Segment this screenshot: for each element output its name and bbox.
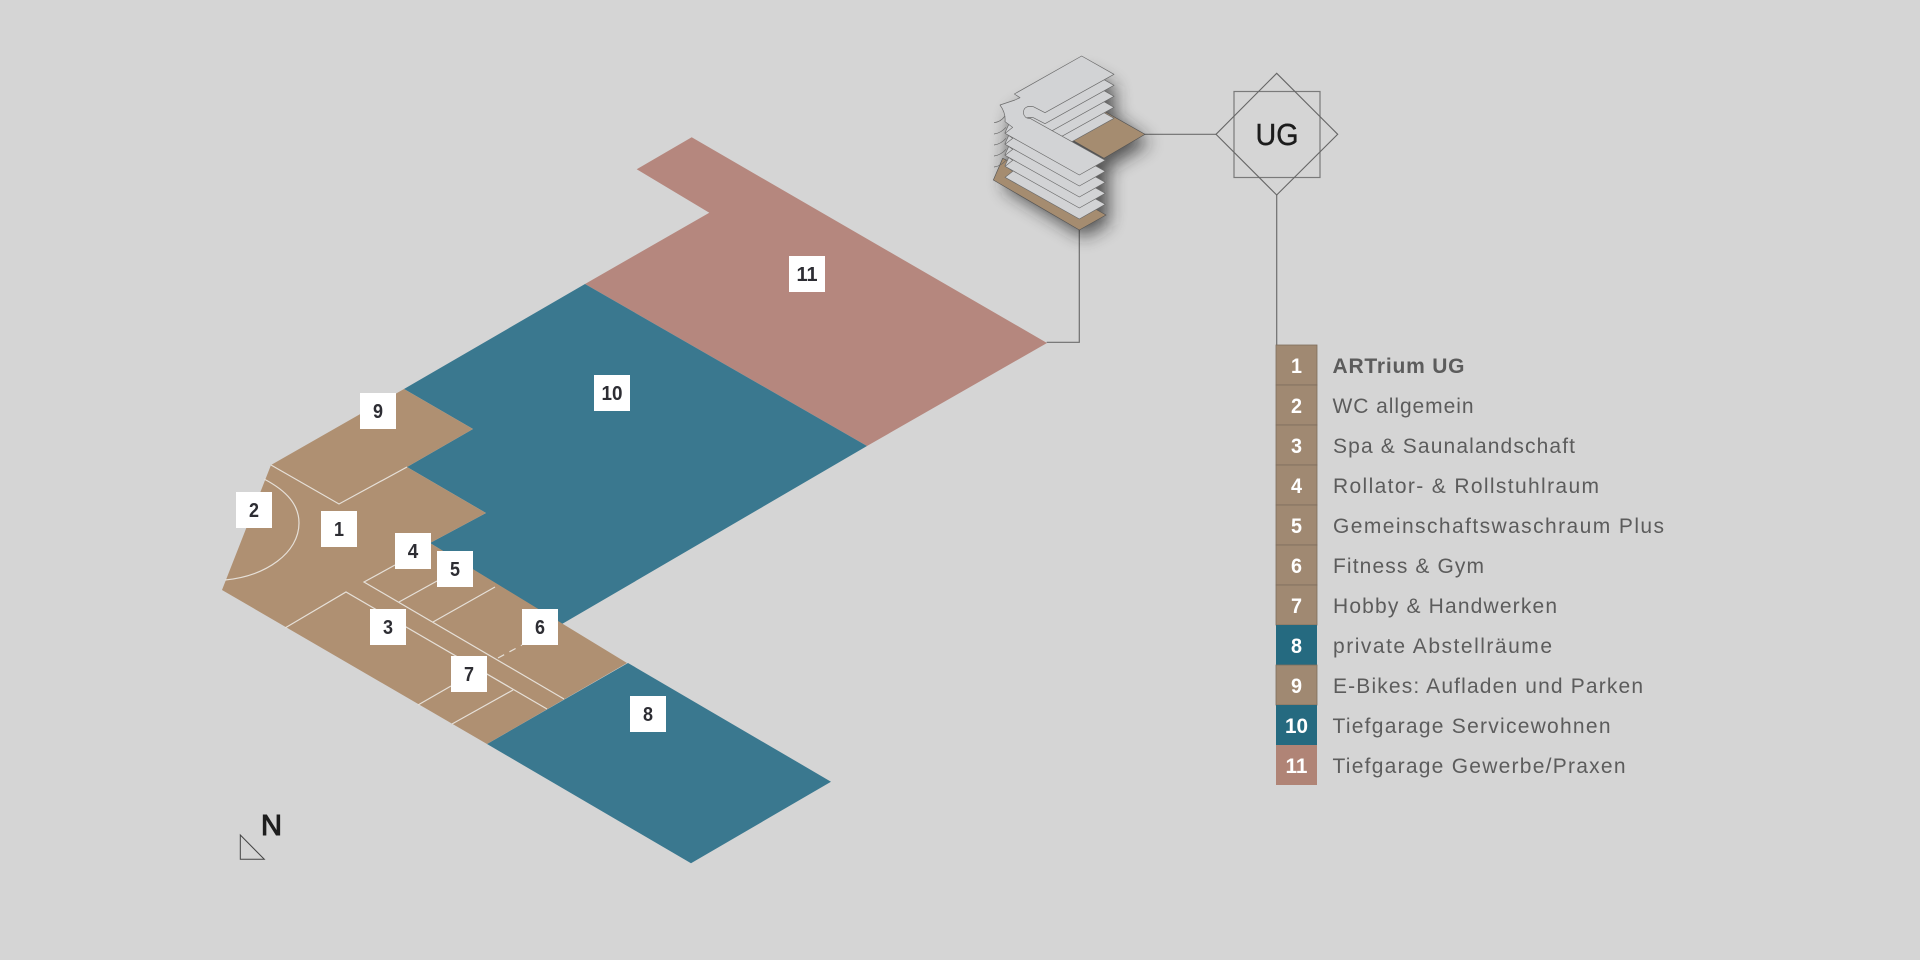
- label 11: [789, 256, 825, 292]
- floor 2: [1005, 67, 1114, 186]
- legend row 5: [1276, 505, 1664, 545]
- legend row 2: 2: [1291, 395, 1302, 418]
- legend row 10: [1276, 705, 1610, 745]
- legend row 9: [1276, 665, 1643, 705]
- floor 4: [1005, 89, 1114, 208]
- legend row 4: [1276, 465, 1599, 505]
- legend row 7: Hobby & Handwerken: [1333, 595, 1557, 618]
- level badge UG: UG: [1256, 117, 1298, 152]
- legend row 7: [1276, 585, 1557, 625]
- legend row 3: [1276, 425, 1575, 465]
- floor plan: [222, 137, 1047, 863]
- brown areas 1-7 and 9: [222, 389, 627, 744]
- legend row 5: Gemeinschaftswaschraum Plus: [1333, 515, 1664, 538]
- legend row 1: 1: [1291, 355, 1302, 378]
- base floor in brown: [993, 112, 1145, 230]
- legend row 4: 4: [1291, 475, 1302, 498]
- legend row 4: Rollator- & Rollstuhlraum: [1333, 475, 1599, 498]
- legend row 11: Tiefgarage Gewerbe/Praxen: [1332, 755, 1626, 778]
- label 4: [395, 533, 431, 569]
- left edge arcs: [994, 116, 1006, 167]
- legend row 1: ARTrium UG: [1332, 355, 1464, 378]
- area 11: Tiefgarage Gewerbe/Praxen: [585, 137, 1047, 446]
- label 1: [321, 511, 357, 547]
- legend: [1276, 345, 1664, 785]
- legend row 10: Tiefgarage Servicewohnen: [1332, 715, 1610, 738]
- label 10: 10: [602, 382, 622, 405]
- area 10: Tiefgarage Servicewohnen: [404, 284, 867, 624]
- label 10: [594, 375, 630, 411]
- legend row 8: 8: [1291, 635, 1302, 658]
- label 5: [437, 551, 473, 587]
- label 7: [451, 656, 487, 692]
- legend row 1: [1276, 345, 1464, 385]
- legend row 11: [1276, 745, 1626, 785]
- label 9: [360, 393, 396, 429]
- legend row 2: WC allgemein: [1332, 395, 1474, 418]
- legend row 9: E-Bikes: Aufladen und Parken: [1333, 675, 1643, 698]
- floor 3: [1005, 78, 1114, 197]
- legend row 6: [1276, 545, 1484, 585]
- label 1: 1: [334, 518, 344, 541]
- legend row 8: private Abstellräume: [1333, 635, 1552, 658]
- level badge UG: [1216, 73, 1338, 195]
- label 7: 7: [464, 663, 474, 686]
- shadow: [1005, 72, 1150, 237]
- label 11: 11: [796, 263, 818, 286]
- label 8: [630, 696, 666, 732]
- legend row 6: Fitness & Gym: [1333, 555, 1484, 578]
- legend row 7: 7: [1291, 595, 1302, 618]
- label 2: [236, 492, 272, 528]
- label 6: 6: [535, 616, 545, 639]
- legend row 6: 6: [1291, 555, 1302, 578]
- label 3: [370, 609, 406, 645]
- label 8: 8: [643, 703, 653, 726]
- floor 1 top: [1000, 56, 1114, 175]
- north arrow: [240, 810, 282, 859]
- legend row 5: 5: [1291, 515, 1302, 538]
- area 8: private Abstellräume: [487, 663, 831, 863]
- legend row 8: [1276, 625, 1552, 665]
- room dividers: [225, 465, 564, 724]
- label 9: 9: [373, 400, 383, 423]
- building stack icon: [993, 56, 1150, 237]
- legend row 9: 9: [1291, 675, 1302, 698]
- connector lines: [1047, 134, 1277, 345]
- label 4: 4: [408, 540, 419, 563]
- label 3: 3: [383, 616, 393, 639]
- legend row 11: 11: [1286, 755, 1308, 778]
- floor 5: [1005, 100, 1114, 219]
- label 5: 5: [450, 558, 460, 581]
- legend row 2: [1276, 385, 1474, 425]
- legend row 3: 3: [1291, 435, 1302, 458]
- label 2: 2: [249, 499, 259, 522]
- label 6: [522, 609, 558, 645]
- legend row 3: Spa & Saunalandschaft: [1333, 435, 1575, 458]
- legend row 10: 10: [1285, 715, 1308, 738]
- north arrow: N: [261, 810, 282, 842]
